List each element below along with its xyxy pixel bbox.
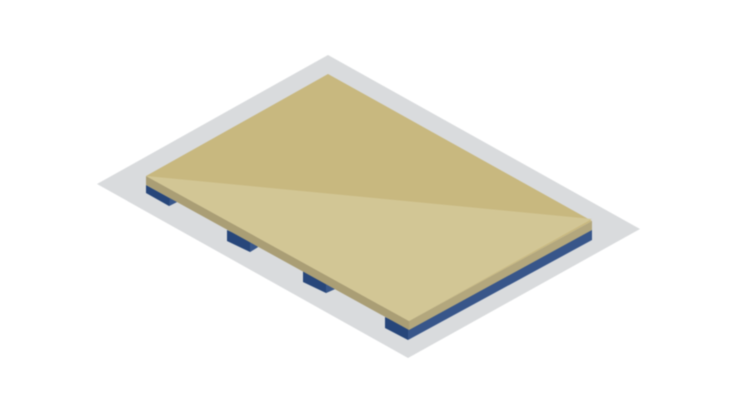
board top surface: [146, 74, 592, 321]
light reflection facet: [146, 176, 592, 321]
navy side strip: [408, 229, 592, 340]
left tan edge of board: [146, 176, 409, 330]
pallet foot: third: [303, 271, 335, 293]
base shadow plane: [97, 55, 640, 358]
pallet foot: front corner: [385, 317, 409, 340]
pallet foot: rear left: [146, 185, 177, 206]
right tan edge of board: [409, 221, 592, 330]
pallet foot: second: [227, 230, 258, 252]
